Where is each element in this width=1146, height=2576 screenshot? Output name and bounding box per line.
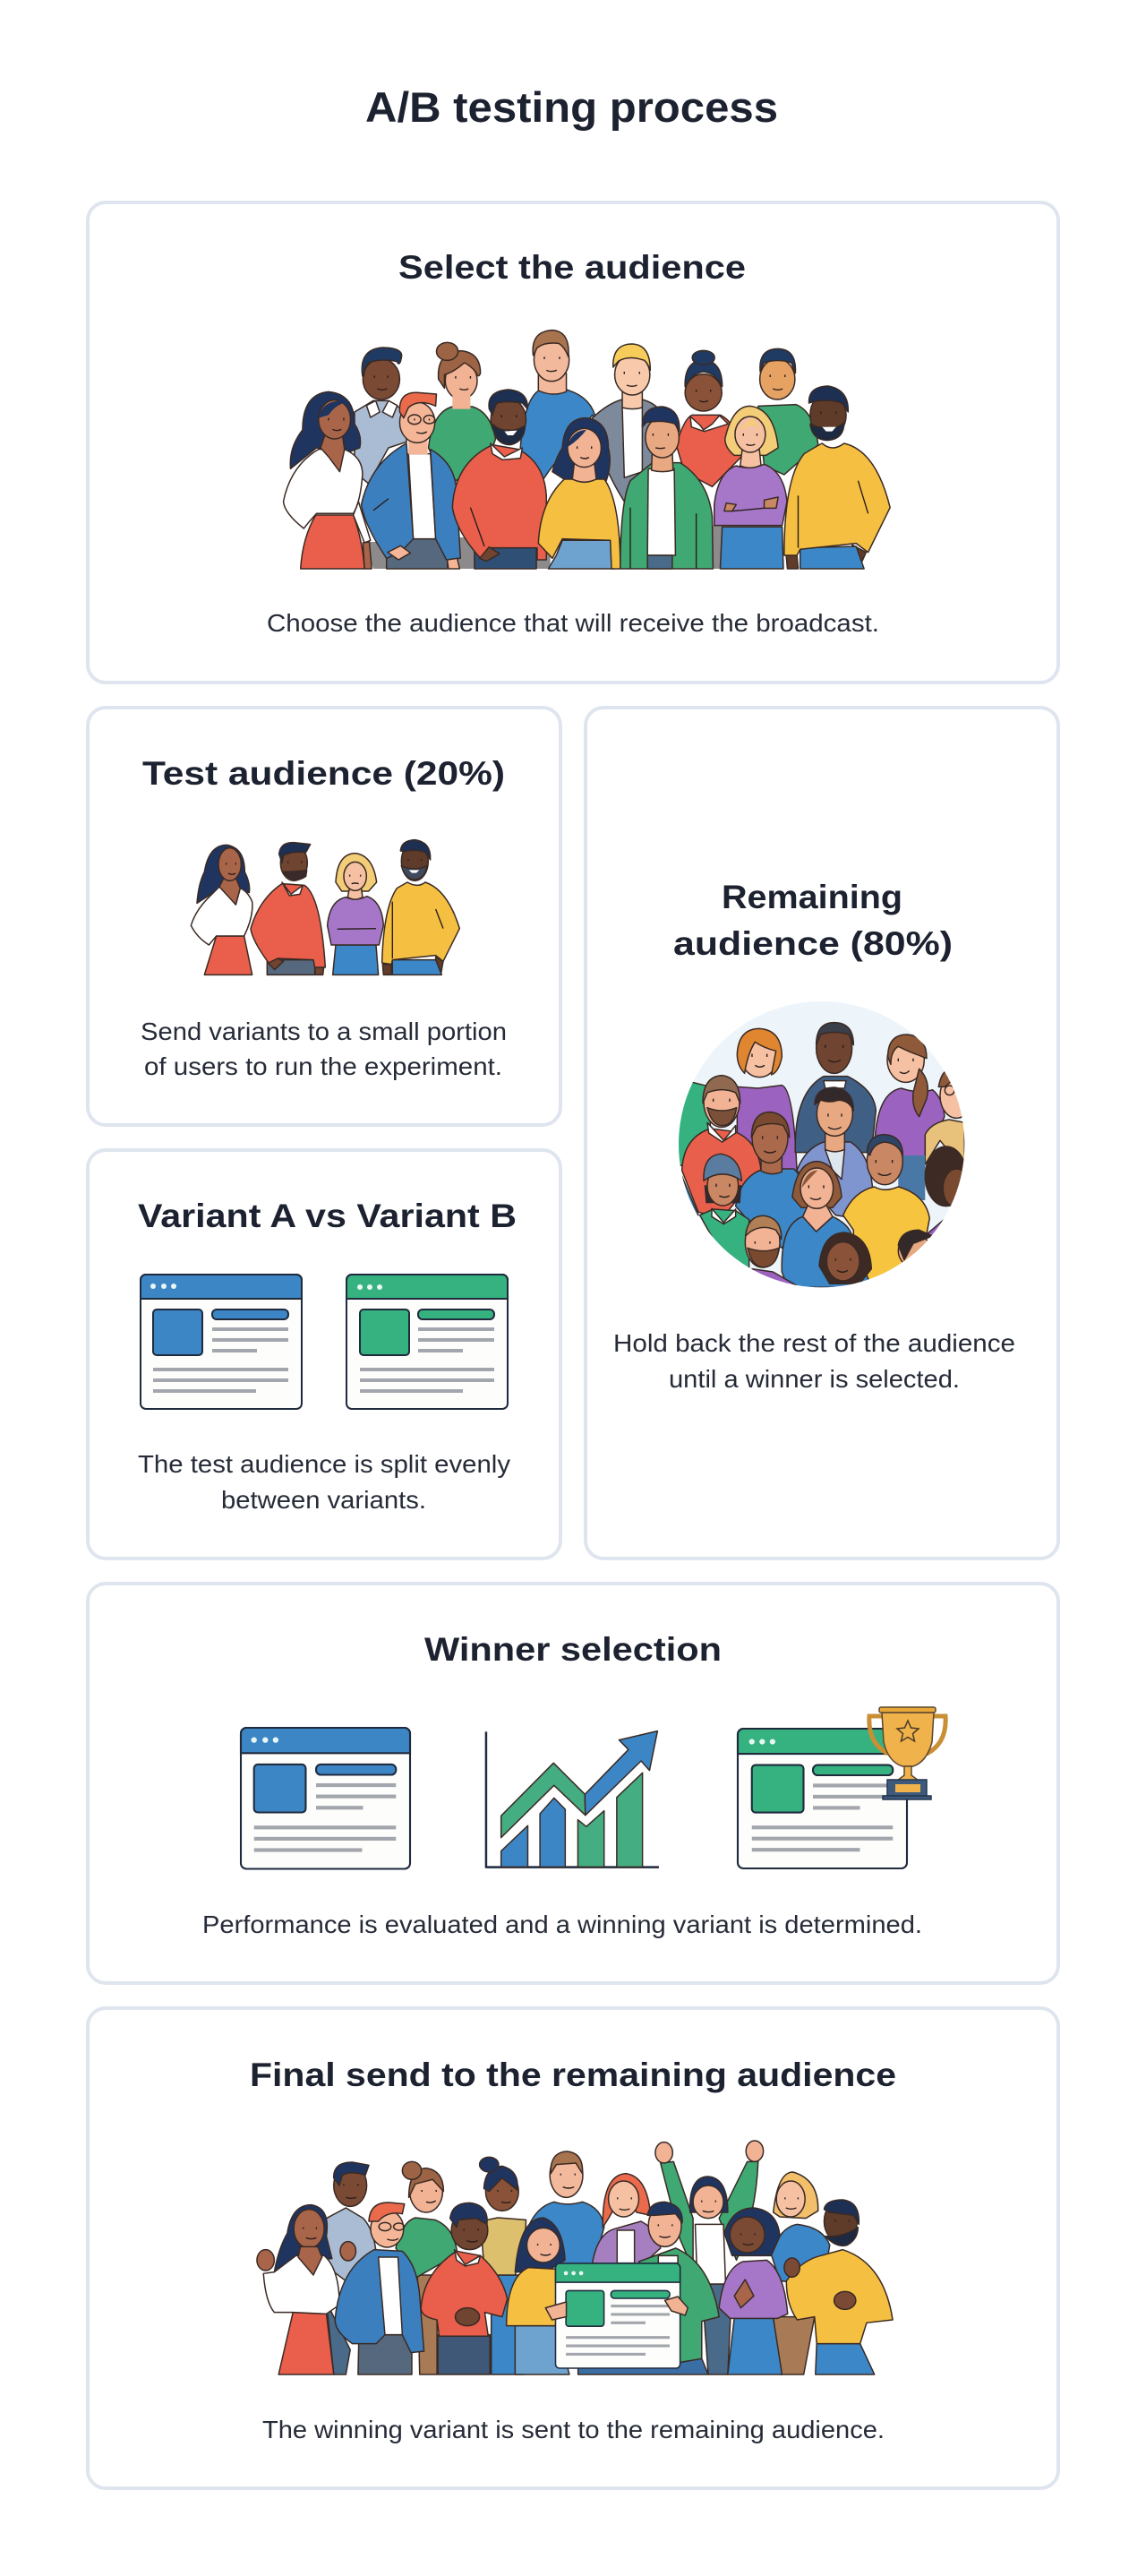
person: ponytail woman in purple (875, 1035, 945, 1158)
panel: select the audience (88, 202, 1058, 683)
person: woman with bun in green (396, 2161, 458, 2374)
icon: blue variant window (241, 1728, 410, 1868)
icon: trophy (869, 1707, 945, 1799)
hands gripping the window (545, 2297, 688, 2320)
person: curly-haired woman in purple (719, 2208, 788, 2374)
body text: of users to run the experiment. (144, 1052, 502, 1080)
person: woman with raised arms (655, 2141, 764, 2374)
icon: window variant A (141, 1275, 302, 1409)
person: man in yellow sweater (382, 840, 459, 975)
person: green figure at edge (679, 1082, 711, 1166)
card border (88, 202, 1058, 683)
person: woman in white shirt raising a fist (257, 2205, 339, 2374)
person: woman with bun in green (429, 342, 496, 481)
person: man in grey-blue shirt (327, 2162, 376, 2374)
heading: Test audience (20%) (142, 755, 505, 792)
title: A/B testing process (365, 83, 778, 131)
body text: Choose the audience that will receive the broadcast. (267, 609, 879, 637)
panel: test audience (88, 708, 560, 1125)
person: man in grey-blue shirt (355, 348, 406, 484)
body text: The test audience is split evenly (138, 1450, 510, 1478)
person: man in green jacket (578, 2202, 719, 2374)
person: curly-haired woman (924, 1146, 963, 1238)
card border (88, 2008, 1058, 2488)
person: bearded man in red (682, 1076, 761, 1218)
person: man in green jacket (620, 407, 713, 569)
person: blonde woman in purple (328, 854, 383, 975)
infographic canvas (86, 91, 1060, 2490)
person: orange-haired woman in purple (737, 1028, 797, 1171)
person: bearded man in yellow sweater (784, 2200, 893, 2374)
illustration: celebrating crowd with window (257, 2141, 893, 2374)
card border (88, 708, 560, 1125)
person: woman with bun in tan (480, 2157, 526, 2374)
person: blonde woman in purple sweater (714, 406, 787, 569)
person: woman with bun in red top (676, 350, 744, 486)
panel: winner selection (88, 1584, 1058, 1983)
card border (88, 1584, 1058, 1983)
body text: until a winner is selected. (669, 1365, 960, 1393)
person: woman in white shirt (191, 845, 252, 975)
heading: Variant A vs Variant B (138, 1198, 517, 1234)
body text: Performance is evaluated and a winning variant is determined. (202, 1911, 922, 1938)
panel: variant A vs variant B (88, 1150, 560, 1558)
axes (486, 1731, 659, 1868)
body text (138, 1450, 510, 1514)
person: tall man in blue (528, 2151, 604, 2266)
person: blond man in grey jacket (593, 344, 658, 502)
heading: Remaining (722, 879, 902, 915)
chart: rising bars with arrow (486, 1731, 659, 1868)
panel: final send (88, 2008, 1058, 2488)
body text: Send variants to a small portion (141, 1018, 507, 1045)
person: red-haired man with glasses and blue jacket (362, 392, 460, 569)
bars (501, 1773, 643, 1867)
person: man with glasses in tan (924, 1071, 965, 1169)
body text: The winning variant is sent to the remaining audience. (262, 2416, 885, 2443)
card border (586, 708, 1058, 1558)
icon: window variant B (346, 1275, 508, 1409)
illustration: four people (191, 840, 459, 975)
person: bearded man in yellow sweater (784, 386, 890, 569)
heading: Final send to the remaining audience (250, 2057, 896, 2093)
person: man at bottom right (897, 1229, 932, 1263)
green arrow segment (501, 1763, 586, 1838)
person: man in blue shirt (736, 1112, 808, 1248)
person: man in red sweater (251, 843, 325, 975)
illustration: circular crowd (679, 1001, 965, 1288)
heading: audience (80%) (673, 925, 953, 962)
person: man in green shirt (758, 348, 818, 475)
card border (88, 1150, 560, 1558)
person: dark-skinned man in navy jacket (795, 1023, 876, 1153)
person: woman in blue V-neck (782, 1162, 871, 1287)
illustration: crowd of thirteen people (284, 331, 890, 569)
person: dark-haired woman at bottom (819, 1232, 871, 1284)
person: boy with beanie in green (682, 1154, 749, 1272)
person: red-haired woman in purple jacket (593, 2174, 661, 2266)
heading: Select the audience (398, 249, 746, 286)
person: red-haired man with glasses and blue jacket (335, 2202, 424, 2374)
body text: between variants. (221, 1486, 426, 1514)
circle background (680, 1001, 962, 1277)
person: bearded man in red sweater (452, 390, 546, 569)
person: tall man in blue (520, 331, 596, 490)
body text (141, 1018, 507, 1080)
person: woman in yellow sweater (538, 418, 620, 569)
icon: green winning window (738, 1729, 907, 1868)
body text (613, 1329, 1015, 1393)
person: man in red sweater (421, 2202, 508, 2374)
blue arrow head (585, 1731, 657, 1816)
icon: winning window held by the crowd (555, 2263, 680, 2368)
body text: Hold back the rest of the audience (613, 1329, 1015, 1357)
lower background clothing between front-row people (364, 526, 723, 569)
heading: Winner selection (424, 1631, 722, 1668)
panel: remaining audience (586, 708, 1058, 1558)
person: bearded man at bottom (745, 1215, 800, 1287)
person: blonde woman in blue (771, 2172, 830, 2374)
person: woman in white shirt and red skirt (284, 391, 372, 569)
person: boy in periwinkle jacket (797, 1087, 925, 1218)
person: woman in yellow sweater (507, 2218, 569, 2374)
person: man in yellow sweater (843, 1135, 929, 1287)
heading (673, 879, 953, 962)
